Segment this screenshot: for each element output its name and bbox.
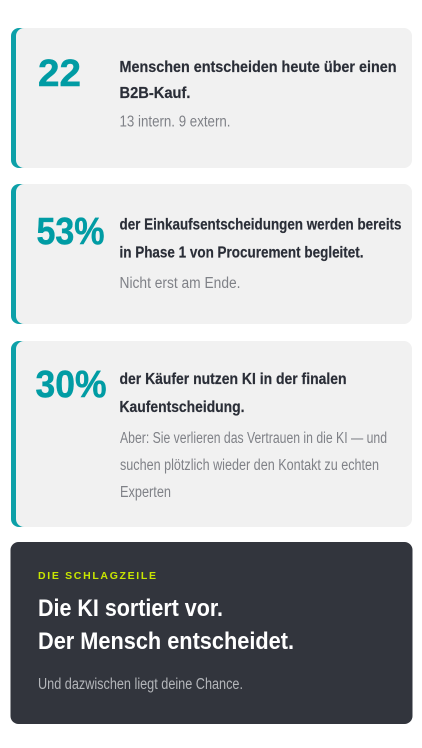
panel: 22 Menschen (11, 28, 412, 168)
statement: B2B-Kauf. (120, 85, 190, 102)
statement: Kaufentscheidung. (120, 399, 244, 416)
closing line: Und dazwischen liegt deine Chance. (38, 676, 243, 693)
note (120, 430, 387, 501)
stat number: 53% (36, 211, 104, 253)
stat number: 22 (38, 53, 81, 95)
accent bar (11, 341, 31, 527)
panel: Die Schlagzeile (10, 542, 412, 724)
statement (120, 59, 396, 102)
statement (120, 216, 402, 262)
statement: Menschen entscheiden heute über einen (120, 59, 396, 76)
headline: Der Mensch entscheidet. (38, 628, 294, 655)
panel: 30 Prozent (11, 341, 412, 527)
note: Nicht erst am Ende. (120, 275, 240, 292)
card background (10, 542, 412, 724)
headline: Die KI sortiert vor. (38, 595, 223, 622)
headline (38, 595, 294, 655)
eyebrow label: DIE SCHLAGZEILE (38, 570, 156, 582)
card background (16, 184, 412, 324)
panel: 53 Prozent (11, 184, 412, 324)
accent bar (11, 28, 31, 168)
statement: in Phase 1 von Procurement begleitet. (120, 244, 364, 262)
card background (16, 28, 412, 168)
note: Experten (120, 484, 171, 501)
note: 13 intern. 9 extern. (120, 114, 230, 130)
statement (120, 371, 346, 416)
card background (16, 341, 412, 527)
accent bar (11, 184, 31, 324)
stat number: 30% (36, 364, 106, 406)
statement: der Käufer nutzen KI in der finalen (120, 371, 346, 388)
